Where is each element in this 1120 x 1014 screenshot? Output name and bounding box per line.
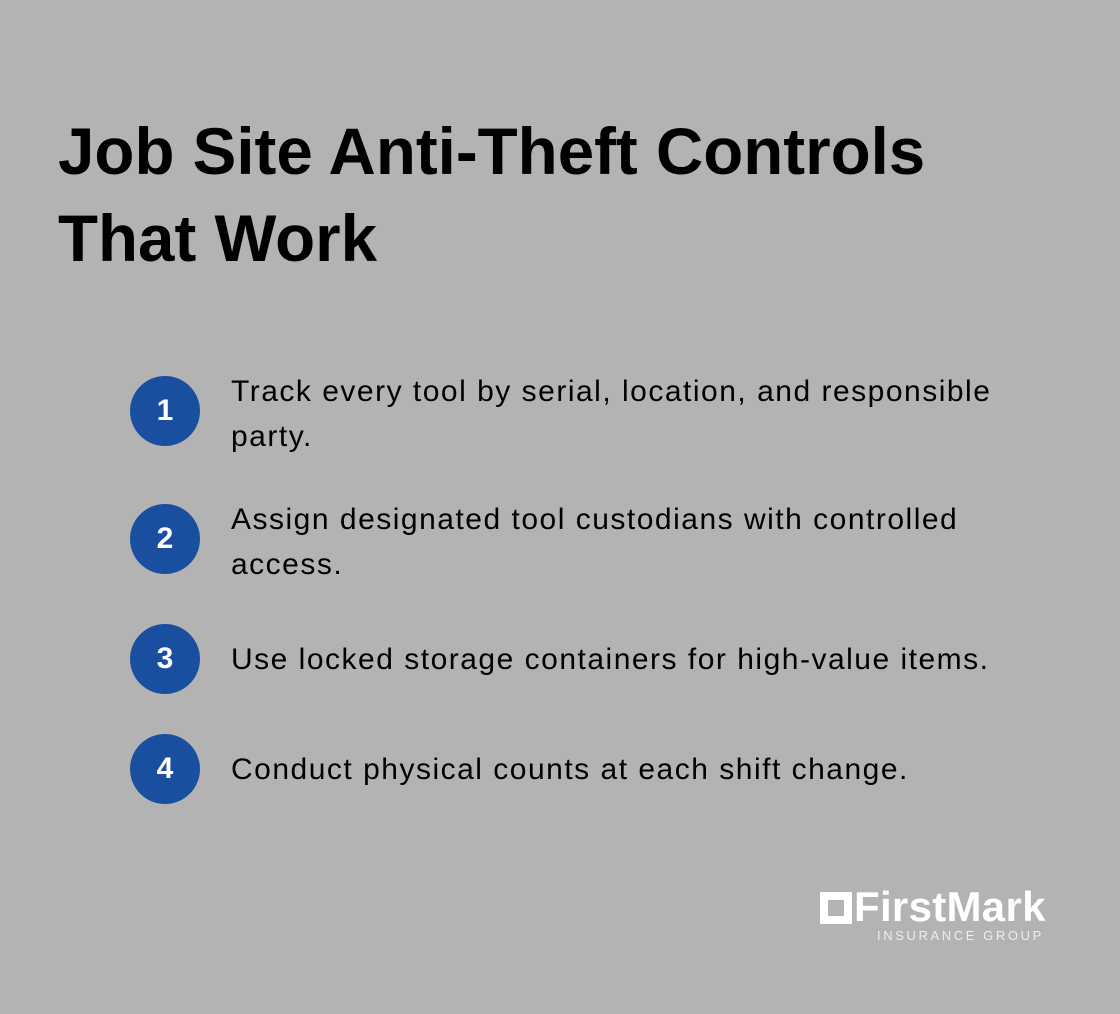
- icon: number 3: [130, 624, 200, 694]
- icon: number 1: 1: [157, 394, 173, 427]
- item 2: [130, 503, 958, 581]
- text 2: Assign designated tool custodians with controlled access.: [231, 503, 958, 581]
- text 1: Track every tool by serial, location, and responsible party.: [231, 375, 991, 453]
- logo mark: [820, 892, 852, 924]
- icon: number 4: 4: [157, 752, 173, 785]
- title: That Work: [58, 202, 377, 275]
- item 1: [130, 375, 991, 453]
- icon: number 1: [130, 376, 200, 446]
- logo: [820, 883, 1046, 943]
- item 4: [130, 734, 909, 804]
- icon: number 3: 3: [157, 642, 173, 675]
- logo subtitle: INSURANCE GROUP: [877, 928, 1044, 943]
- title: [58, 115, 925, 275]
- icon: number 2: 2: [157, 522, 173, 555]
- text 4: Conduct physical counts at each shift change.: [231, 753, 909, 786]
- text 3: Use locked storage containers for high-value items.: [231, 643, 990, 676]
- logo wordmark: FirstMark: [854, 883, 1046, 930]
- icon: number 4: [130, 734, 200, 804]
- item 3: [130, 624, 990, 694]
- icon: number 2: [130, 504, 200, 574]
- title: Job Site Anti-Theft Controls: [58, 115, 925, 188]
